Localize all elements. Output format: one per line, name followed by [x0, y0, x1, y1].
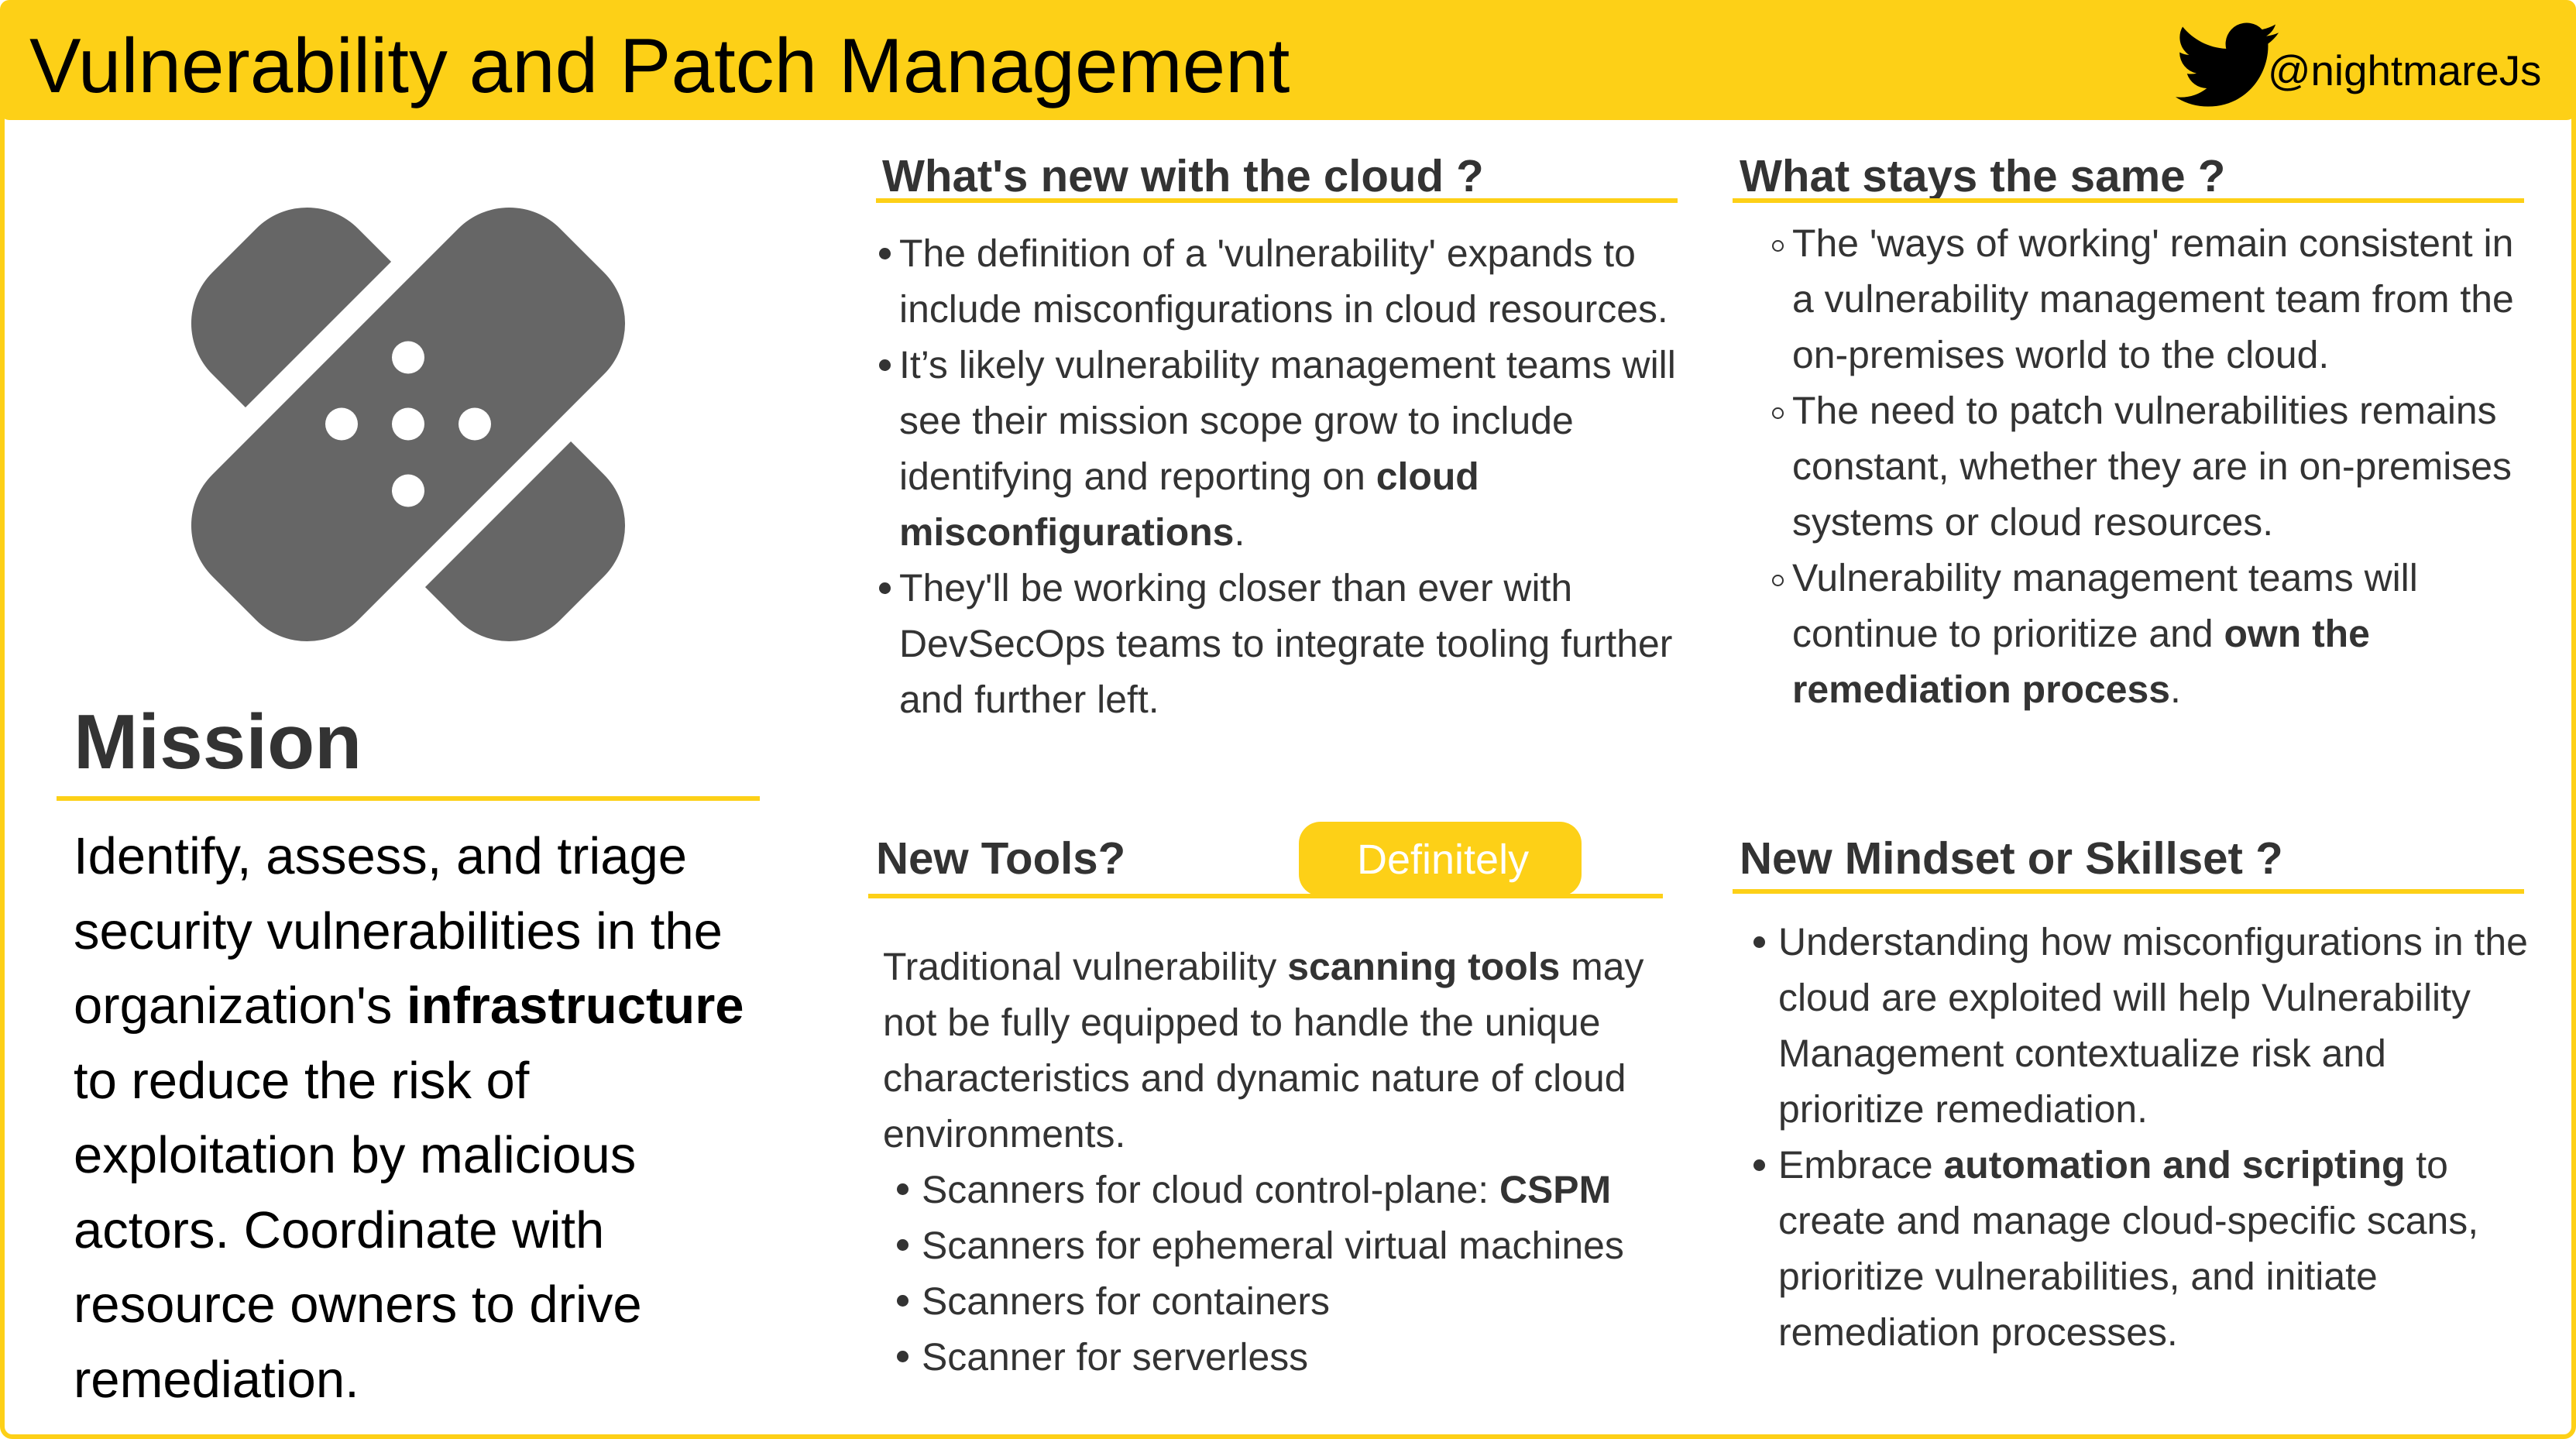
heading: mission: Mission [74, 699, 362, 785]
bullet list: mindset: Understanding how misconfigurations in the [1778, 920, 2528, 963]
bullet list: what's new: It’s likely vulnerability management teams will [899, 343, 1676, 386]
badge: definitely: Definitely [1357, 836, 1529, 883]
heading: what's new: What's new with the cloud ? [882, 151, 1484, 201]
bullet list: what stays the same: continue to prioritize and own the [1792, 612, 2370, 655]
mission statement: Identify, assess, and triage [74, 827, 687, 885]
bullet list: mindset: create and manage cloud-specific scans, [1778, 1199, 2478, 1242]
panel: what stays the same [1733, 151, 2524, 711]
bullet list: mindset [1753, 920, 2528, 1354]
mission statement: exploitation by malicious [74, 1126, 636, 1184]
bullet list: what stays the same: a vulnerability management team from the [1792, 277, 2514, 321]
mission statement: remediation. [74, 1351, 359, 1409]
bullet list: mindset: Embrace automation and scripting to [1778, 1143, 2448, 1187]
bullet list: scanners: Scanners for ephemeral virtual machines [922, 1224, 1624, 1267]
bullet list: scanners: Scanners for containers [922, 1279, 1330, 1323]
bullet list: what's new: misconfigurations. [899, 510, 1245, 554]
bullet list: what's new: and further left. [899, 678, 1159, 721]
paragraph: scanning tools: not be fully equipped to handle the unique [883, 1001, 1601, 1044]
mission statement: organization's infrastructure [74, 977, 744, 1035]
paragraph: scanning tools: characteristics and dynamic nature of cloud [883, 1056, 1626, 1100]
header band [0, 0, 2576, 120]
bullet list: what's new: identifying and reporting on cloud [899, 455, 1479, 498]
mission statement: resource owners to drive [74, 1276, 642, 1334]
bullet list: what stays the same: The need to patch vulnerabilities remains [1792, 389, 2497, 432]
icon: crossed bandage [191, 208, 625, 641]
bullet list: what's new: see their mission scope grow to include [899, 399, 1574, 442]
bullet list: what's new: DevSecOps teams to integrate tooling further [899, 622, 1672, 665]
bullet list: mindset: prioritize vulnerabilities, and initiate [1778, 1255, 2378, 1298]
mission statement [74, 827, 744, 1409]
mission statement: to reduce the risk of [74, 1052, 529, 1110]
twitter handle: @nightmareJs [2268, 46, 2541, 94]
bullet list: what stays the same: remediation process. [1792, 668, 2181, 711]
bullet list: what stays the same: systems or cloud resources. [1792, 500, 2273, 544]
paragraph: scanning tools: environments. [883, 1112, 1125, 1156]
heading: new mindset or skillset: New Mindset or Skillset ? [1740, 833, 2283, 884]
bullet list: what's new [879, 232, 1676, 721]
bullet list: mindset: Management contextualize risk and [1778, 1032, 2386, 1075]
panel: new tools [868, 822, 1663, 1379]
icon: twitter bird [2176, 23, 2279, 107]
bullet list: what stays the same [1772, 222, 2514, 711]
paragraph: scanning tools [883, 945, 1643, 1156]
panel: mission [57, 699, 760, 1409]
mission statement: security vulnerabilities in the [74, 902, 723, 960]
bullet list: what stays the same: The 'ways of working' remain consistent in [1792, 222, 2513, 265]
badge: definitely [1299, 822, 1582, 896]
bullet list: scanners: Scanner for serverless [922, 1335, 1308, 1379]
bullet list: mindset: cloud are exploited will help Vulnerability [1778, 976, 2471, 1019]
mission statement: actors. Coordinate with [74, 1201, 604, 1259]
title: Vulnerability and Patch Management [29, 23, 1290, 109]
panel: new mindset or skillset [1733, 833, 2528, 1354]
bullet list: mindset: prioritize remediation. [1778, 1087, 2148, 1131]
bullet list: mindset: remediation processes. [1778, 1310, 2178, 1354]
bullet list: scanners: Scanners for cloud control-plane: CSPM [922, 1168, 1611, 1211]
paragraph: scanning tools: Traditional vulnerability scanning tools may [883, 945, 1643, 988]
bullet list: what's new: They'll be working closer than ever with [899, 566, 1572, 610]
bullet list: what's new: include misconfigurations in cloud resources. [899, 287, 1668, 331]
heading: what stays the same: What stays the same ? [1740, 151, 2225, 201]
bullet list: what stays the same: Vulnerability management teams will [1792, 556, 2418, 599]
bullet list: what stays the same: constant, whether they are in on-premises [1792, 445, 2512, 488]
bullet list: what stays the same: on-premises world to the cloud. [1792, 333, 2329, 376]
heading: new tools: New Tools? [876, 833, 1125, 884]
bullet list: scanners [897, 1168, 1624, 1379]
panel: what's new with the cloud [876, 151, 1678, 721]
bullet list: what's new: The definition of a 'vulnerability' expands to [899, 232, 1636, 275]
